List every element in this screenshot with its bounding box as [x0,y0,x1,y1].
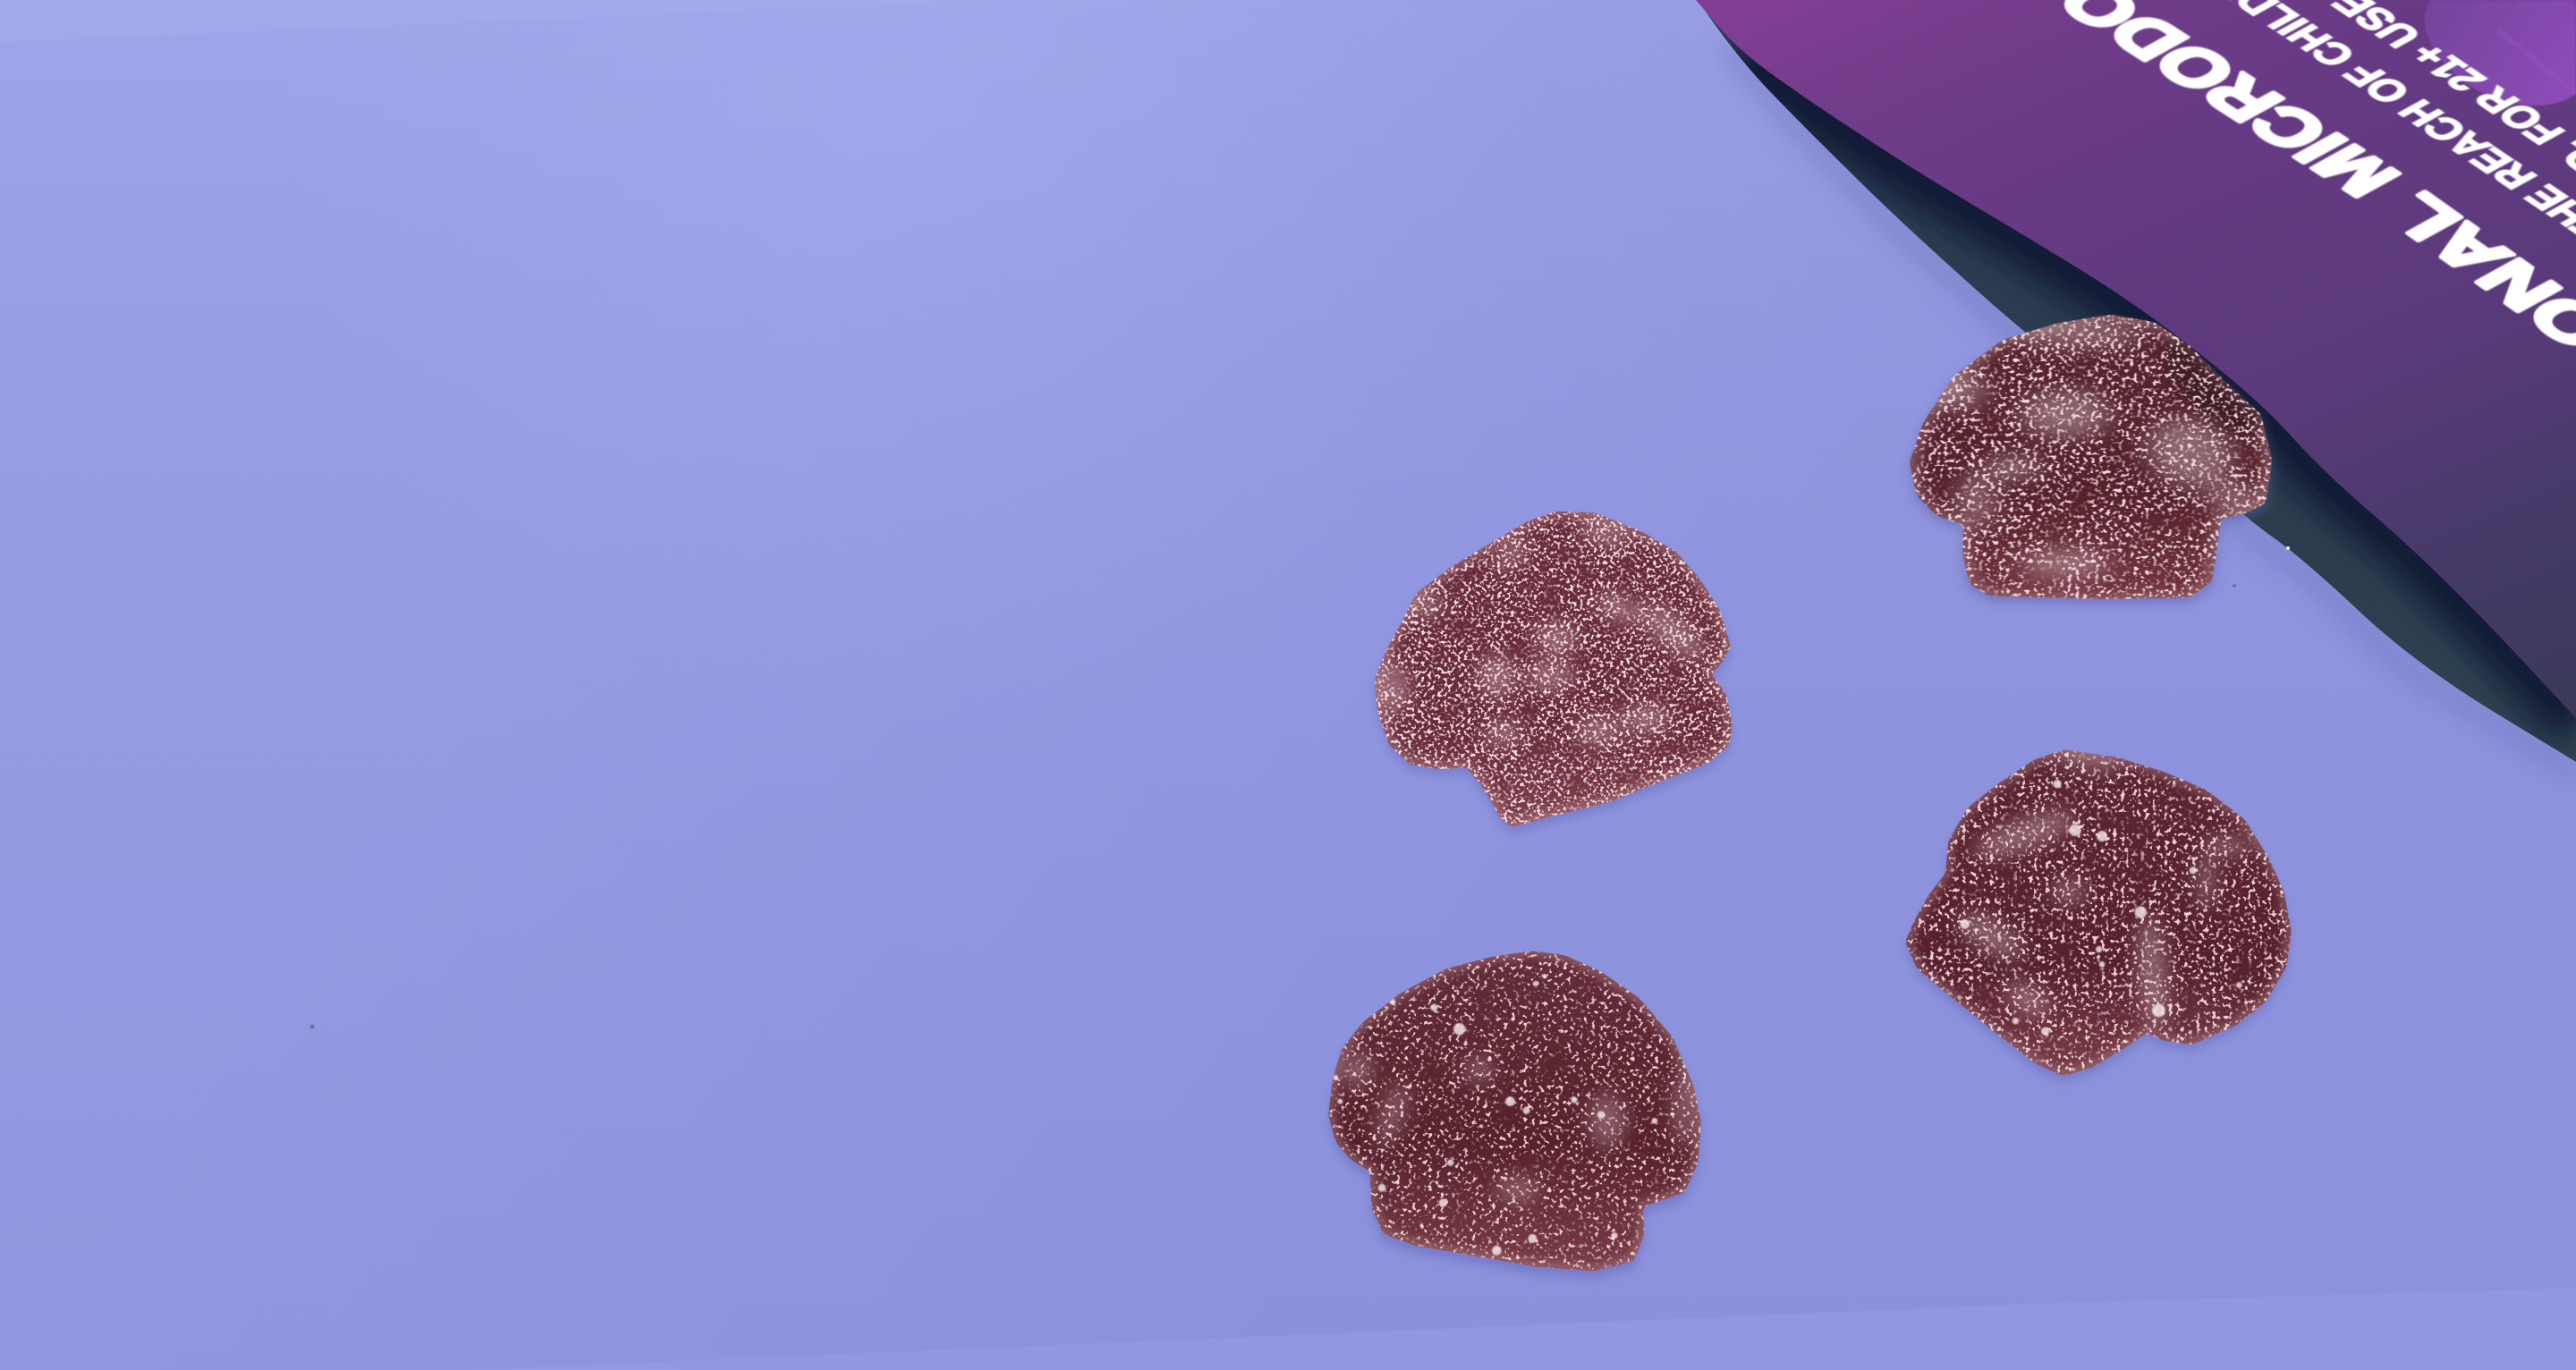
pouch inner shade [1740,54,2576,723]
pouch warning line: keep out of reach [2155,0,2576,402]
gummy body [1909,315,2272,599]
gummy: right lower [1905,749,2292,1082]
pouch [1696,0,2576,771]
gummy body [1905,749,2292,1076]
pouch light graphic blob [2425,0,2576,106]
gummy: centre top [1374,511,1733,833]
gummy body [1328,951,1701,1272]
pouch back panel [1704,9,2576,762]
gummy body [1374,511,1733,826]
gummy: by the pouch opening [1907,315,2277,606]
small speck on pouch edge [2286,546,2290,550]
gummy shadow [1375,518,1733,833]
pouch front panel [1696,0,2576,718]
gummy: centre bottom [1327,951,1701,1281]
gummy shadow [1905,757,2292,1083]
pouch shadow [1726,45,2576,771]
gummy shadow [1328,959,1701,1279]
pouch headline text [1956,0,2576,539]
gummy shadow [1910,320,2272,605]
